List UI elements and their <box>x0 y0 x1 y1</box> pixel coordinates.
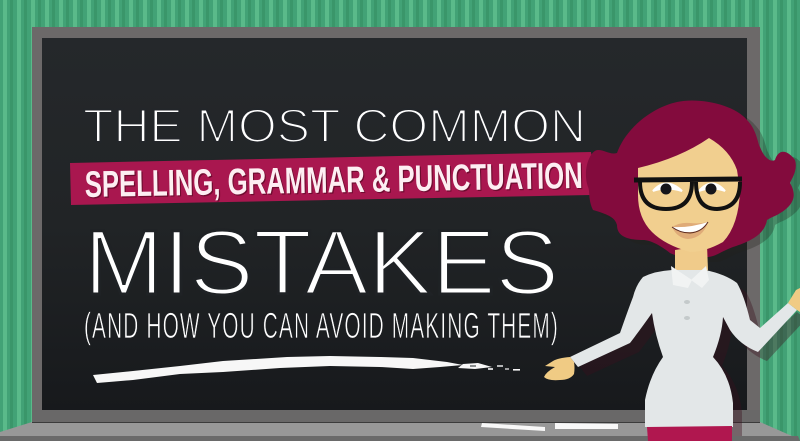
buttons <box>684 300 690 320</box>
chalk pieces <box>481 423 618 431</box>
body shadow <box>579 279 800 436</box>
banner text shadow: SPELLING, GRAMMAR & PUNCTUATION <box>86 156 584 206</box>
skirt <box>647 426 732 441</box>
face <box>638 138 740 252</box>
banner: spelling, grammar and punctuation <box>70 152 594 206</box>
neck <box>675 245 708 285</box>
mouth <box>672 222 708 239</box>
title line: the most common: THE MOST COMMON <box>83 100 586 153</box>
subtitle: (AND HOW YOU CAN AVOID MAKING THEM) <box>84 306 558 347</box>
title line: mistakes: MISTAKES <box>84 212 559 314</box>
eyes <box>653 184 725 194</box>
board surface <box>42 38 747 410</box>
chalk underline <box>93 356 520 383</box>
chalk tray <box>0 410 800 441</box>
hair shadow <box>594 106 800 262</box>
left hand <box>544 357 574 380</box>
hair <box>586 101 796 257</box>
board frame <box>32 27 760 411</box>
banner text: SPELLING, GRAMMAR & PUNCTUATION <box>84 155 583 205</box>
teacher character <box>544 101 800 441</box>
blouse <box>570 270 797 427</box>
glasses <box>634 179 742 209</box>
banner ribbon <box>70 152 594 205</box>
collar <box>671 266 709 288</box>
right hand <box>788 288 800 312</box>
